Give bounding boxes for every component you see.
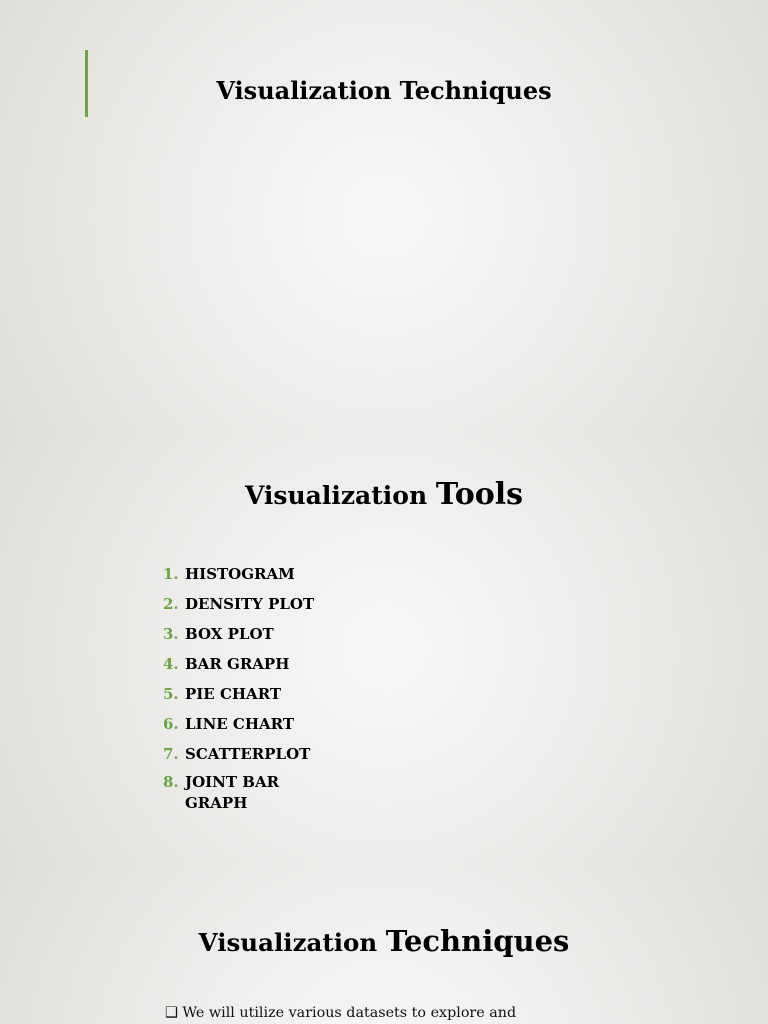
list of tools: PIE CHART (185, 685, 281, 703)
bullet text: ❑ We will utilize various datasets to explore and (165, 1005, 516, 1021)
list of tools: BAR GRAPH (185, 655, 289, 673)
list of tools (163, 565, 314, 812)
title 2: Visualization Tools (245, 477, 523, 512)
list of tools: SCATTERPLOT (185, 745, 310, 763)
slide 1 (0, 0, 768, 432)
list of tools: 2. (163, 595, 179, 613)
list of tools: 3. (163, 625, 179, 643)
list of tools: 1. (163, 565, 179, 583)
list of tools: HISTOGRAM (185, 565, 295, 583)
list of tools: DENSITY PLOT (185, 595, 314, 613)
list of tools: 5. (163, 685, 179, 703)
list of tools: 7. (163, 745, 179, 763)
title 3: Visualization Techniques (199, 924, 569, 958)
list of tools: LINE CHART (185, 715, 294, 733)
list of tools: GRAPH (185, 794, 247, 812)
list of tools: 8. (163, 773, 179, 791)
slide 2 (0, 432, 768, 864)
list of tools: JOINT BAR (185, 773, 279, 791)
title 1: Visualization Techniques (216, 76, 552, 105)
list of tools: 6. (163, 715, 179, 733)
list of tools: 4. (163, 655, 179, 673)
slide 3 (0, 864, 768, 1024)
list of tools: BOX PLOT (185, 625, 274, 643)
accent bar (85, 50, 88, 117)
